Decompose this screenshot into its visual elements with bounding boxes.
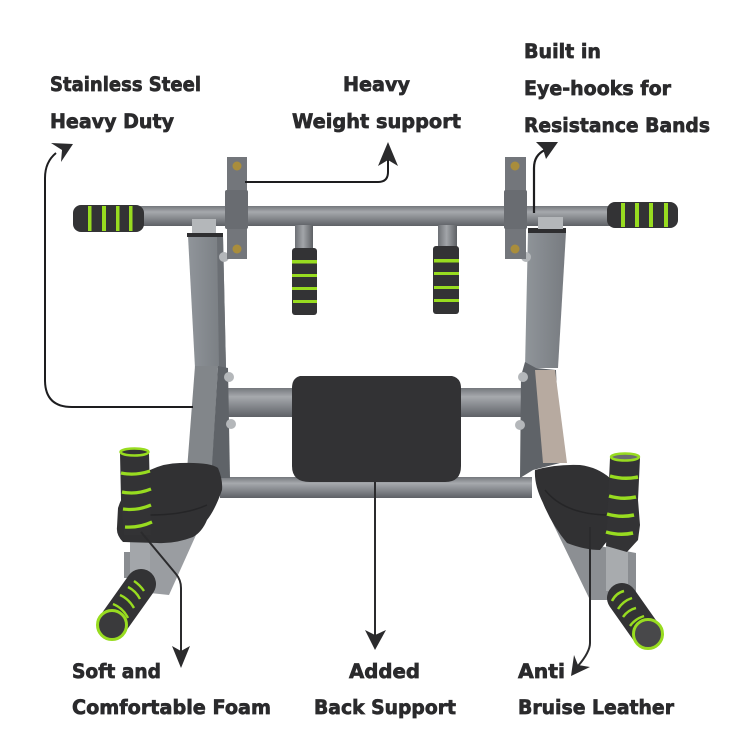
label: heavy weight support: Heavy bbox=[343, 73, 410, 96]
label: anti bruise leather bbox=[518, 660, 674, 719]
frame: middle tube bbox=[226, 388, 526, 417]
label: eye-hooks: Eye-hooks for bbox=[524, 77, 671, 100]
label: eye-hooks: Built in bbox=[524, 40, 601, 63]
wall bracket: right bbox=[504, 157, 527, 259]
label: comfortable foam bbox=[72, 660, 271, 719]
label: comfortable foam: Comfortable Foam bbox=[72, 696, 271, 719]
label: anti bruise leather: Anti bbox=[518, 660, 565, 683]
frame: lower rear tube bbox=[220, 477, 532, 498]
label: stainless steel: Heavy Duty bbox=[50, 110, 174, 133]
label: back support bbox=[314, 660, 456, 719]
arrow: back support callout bbox=[365, 482, 386, 650]
left lower assembly bbox=[98, 535, 196, 640]
arrow: stainless steel callout bbox=[45, 143, 193, 407]
label: back support: Added bbox=[349, 660, 420, 683]
foam grip: lower left bbox=[98, 581, 144, 640]
hanging handle: right bbox=[433, 225, 459, 314]
label: stainless steel: Stainless Steel bbox=[50, 73, 201, 96]
hanging handle: left bbox=[292, 225, 317, 315]
arrow: weight support callout bbox=[245, 142, 398, 182]
label: eye-hooks: Resistance Bands bbox=[524, 114, 710, 137]
foam grip: top right bbox=[607, 202, 678, 228]
label: heavy weight support: Weight support bbox=[292, 110, 461, 133]
right upright foam bbox=[606, 453, 640, 552]
label: eye-hooks bbox=[524, 40, 710, 137]
frame: top bar bbox=[140, 206, 612, 233]
arrow: foam callout bbox=[141, 532, 190, 668]
right seat pad bbox=[535, 465, 612, 550]
label: stainless steel bbox=[50, 73, 201, 133]
arrow: leather callout bbox=[571, 527, 590, 676]
frame: right upright bbox=[515, 228, 567, 478]
label: back support: Back Support bbox=[314, 696, 456, 719]
foam grip: top left bbox=[73, 205, 144, 232]
arrow: eye-hooks callout bbox=[534, 142, 558, 213]
frame: left upright bbox=[187, 233, 236, 478]
left seat pad bbox=[117, 463, 222, 543]
right lower assembly bbox=[543, 503, 662, 648]
label: heavy weight support bbox=[292, 73, 461, 133]
label: comfortable foam: Soft and bbox=[72, 660, 161, 683]
back pad bbox=[292, 376, 461, 482]
left upright foam bbox=[120, 448, 152, 535]
foam grip: lower right bbox=[612, 591, 662, 648]
wall bracket: left bbox=[225, 157, 248, 259]
label: anti bruise leather: Bruise Leather bbox=[518, 696, 674, 719]
